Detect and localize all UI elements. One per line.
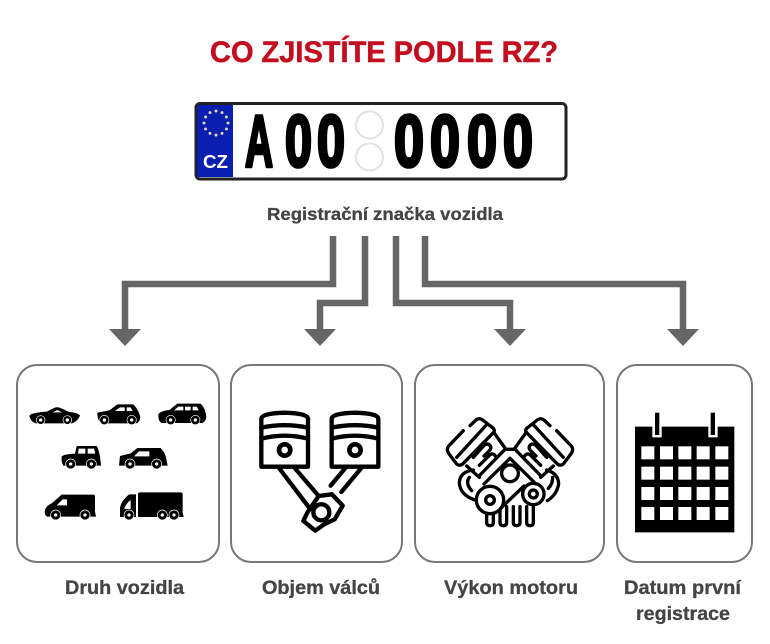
plate: registration number: 0 <box>467 102 497 182</box>
icon: left cylinder <box>447 419 505 477</box>
icon: van <box>45 495 96 520</box>
icon: calendar <box>635 413 734 532</box>
label: cylinder capacity: Objem válců <box>262 578 380 599</box>
icon: sports car <box>29 407 80 425</box>
plate: sticker circles <box>356 112 383 170</box>
icon: truck <box>120 492 184 520</box>
icon: vehicles <box>29 404 206 520</box>
icon: right piston <box>332 413 378 467</box>
label: first registration date: Datum první <box>624 578 742 599</box>
arrow: to Druh vozidla <box>109 236 333 346</box>
arrow: to Výkon motoru <box>396 236 526 346</box>
icon: engine block <box>459 449 559 508</box>
plate: registration number: 0 <box>317 102 345 182</box>
panel: engine power <box>415 365 604 562</box>
icon: station wagon <box>158 404 206 425</box>
panel: cylinder capacity <box>231 365 402 562</box>
plate: registration number: 0 <box>394 102 424 182</box>
plate: registration number: 0 <box>430 102 460 182</box>
plate: CZ country code: CZ <box>203 152 228 172</box>
label: first registration date <box>624 578 742 625</box>
icon: SUV <box>119 448 168 469</box>
license plate <box>196 102 566 182</box>
panel: first registration date <box>617 365 752 562</box>
icon: off-road car <box>62 446 101 469</box>
icon: left pulley <box>476 486 504 514</box>
icon: right cylinder <box>515 419 573 477</box>
panel: vehicle types <box>17 365 219 562</box>
icon: EU stars <box>202 110 230 136</box>
icon: engine <box>447 419 573 526</box>
arrow: to Datum první registrace <box>425 236 699 346</box>
icon: oil pan fins <box>487 505 533 526</box>
plate: registration number <box>245 102 533 182</box>
label: engine power: Výkon motoru <box>444 578 578 599</box>
icon: left piston <box>261 413 308 467</box>
plate: registration number: A <box>245 102 273 182</box>
label: first registration date: registrace <box>636 604 730 625</box>
icon: connecting rod <box>279 468 361 531</box>
plate: blue EU band <box>197 105 233 177</box>
icon: pistons <box>261 413 378 531</box>
icon: hatchback <box>97 404 140 425</box>
arrow: to Objem válců <box>304 236 365 346</box>
plate: registration number: 0 <box>285 102 312 182</box>
plate caption: Registrační značka vozidla <box>267 204 503 224</box>
label: vehicle type: Druh vozidla <box>65 578 184 599</box>
arrows <box>109 236 699 346</box>
plate: registration number: 0 <box>503 102 533 182</box>
title: CO ZJISTÍTE PODLE RZ? <box>210 35 558 69</box>
icon: right pulley <box>523 483 544 505</box>
